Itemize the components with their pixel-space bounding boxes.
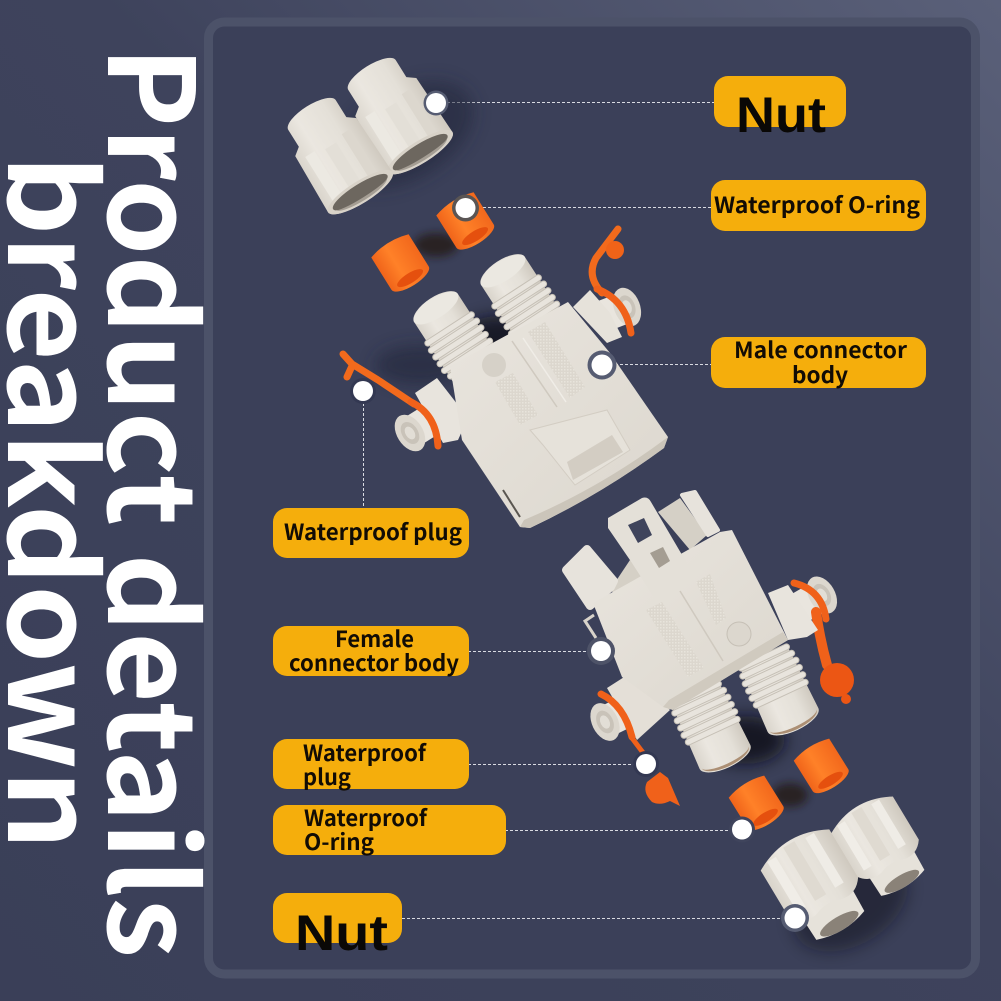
label: Waterproof O-ring lower: O-ring [304,825,375,857]
label: Female connector body [273,622,469,678]
label: Female connector body: connector body [289,646,459,678]
label: Waterproof plug [273,508,469,558]
label: Nut top: Nut [736,87,826,143]
female O-ring band left [601,694,632,737]
part: lower nuts [755,788,936,971]
label: Nut bottom [273,893,402,961]
male main housing [450,302,668,528]
female logo [727,622,751,646]
leader lines [364,102,784,918]
part: top nuts [274,46,492,222]
female posts [610,560,664,612]
label: Nut top [714,76,846,143]
male O-ring bands [597,289,631,333]
male latch [530,410,630,485]
female O-ring band right [794,583,826,619]
label: Female connector body: Female [335,622,414,654]
part: top orange O-rings [369,189,498,297]
male waterproof strap left [343,354,414,404]
label: Waterproof plug lower: Waterproof [303,736,428,768]
label: Waterproof O-ring lower: Waterproof [304,801,429,833]
label: Waterproof O-ring lower [273,801,506,857]
male logo [482,353,506,377]
label: Male connector body: body [792,358,848,390]
female ears [768,585,818,640]
title line 1: Product details [73,46,245,958]
female main housing [593,530,788,710]
label: Nut bottom: Nut [295,905,388,961]
label: Waterproof O-ring top: Waterproof O-ring [714,188,921,220]
label: Waterproof O-ring top [711,180,926,231]
female tubes [666,679,758,780]
male left band [411,402,438,446]
male ears [573,290,622,343]
part: female connector body [566,492,854,780]
part: male connector body [343,229,668,528]
callout dots [350,90,809,932]
female strap right [816,612,827,665]
label: Waterproof plug: Waterproof plug [284,515,463,547]
title [0,46,245,958]
male strap right [592,229,618,293]
female textured panels [646,602,704,677]
part: lower orange O-rings [727,736,852,835]
label: Male connector body [711,333,926,390]
panel: frame [208,22,976,974]
part: waterproof plug lower [632,738,680,806]
label: Waterproof plug lower: plug [303,760,352,792]
male textured panels [495,373,538,425]
label: Male connector body: Male connector [734,333,907,365]
male side plugs [588,284,646,338]
male tubes [472,245,567,348]
female side plugs [783,571,843,629]
female side clip [585,615,596,638]
label: Waterproof plug lower [273,736,469,792]
female tab [608,498,695,602]
